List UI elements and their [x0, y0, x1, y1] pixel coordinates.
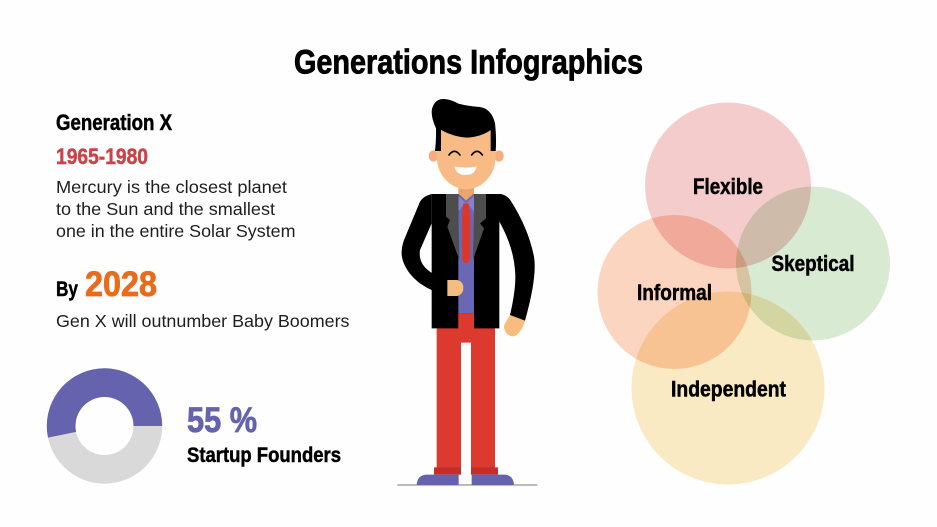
panel: trait circles [598, 102, 890, 484]
ears [429, 150, 504, 162]
title: Generations Infographics [294, 44, 643, 82]
eyes [449, 151, 482, 155]
lapels [446, 194, 486, 260]
circle: Informal [598, 215, 752, 369]
label: Flexible: Flexible [693, 174, 763, 199]
label: Skeptical: Skeptical [772, 251, 854, 276]
neck [458, 187, 474, 201]
face [437, 128, 496, 189]
percentage: 55 % [187, 401, 257, 440]
heading: Generation X: Generation X [56, 110, 172, 135]
label: Informal: Informal [637, 280, 712, 305]
panel: startup founders [47, 368, 341, 469]
label: By: By [56, 278, 78, 301]
description text: Mercury is the closest planet [56, 177, 287, 197]
circle: Independent [632, 292, 824, 484]
head [429, 99, 504, 189]
label: Startup Founders [187, 443, 341, 467]
right hand [504, 315, 525, 336]
statistic text: Gen X will outnumber Baby Boomers [56, 311, 350, 331]
right arm [499, 194, 535, 321]
years: 1965-1980 [56, 144, 148, 169]
donut chart [47, 368, 162, 469]
left hand [447, 280, 463, 296]
shoes [417, 475, 514, 485]
character illustration [397, 99, 537, 486]
ground line [397, 484, 537, 486]
panel: 2028 statistic [56, 265, 350, 331]
description text: one in the entire Solar System [56, 221, 296, 241]
left arm [402, 194, 448, 296]
circle: Flexible [645, 102, 811, 268]
number: 2028: 2028 [85, 265, 157, 304]
tie [462, 203, 470, 263]
label: Independent: Independent [671, 376, 787, 402]
circle: Skeptical [736, 186, 890, 340]
panel: generation description [56, 110, 296, 241]
jacket body [432, 194, 502, 328]
description text [56, 177, 296, 241]
shirt [458, 194, 474, 313]
upper body [402, 187, 535, 336]
hair [432, 99, 496, 151]
mouth [454, 166, 477, 175]
description text: to the Sun and the smallest [56, 199, 275, 219]
belt area [458, 313, 474, 328]
trousers [437, 310, 495, 468]
collar [458, 196, 474, 212]
trouser cuffs [434, 467, 498, 475]
